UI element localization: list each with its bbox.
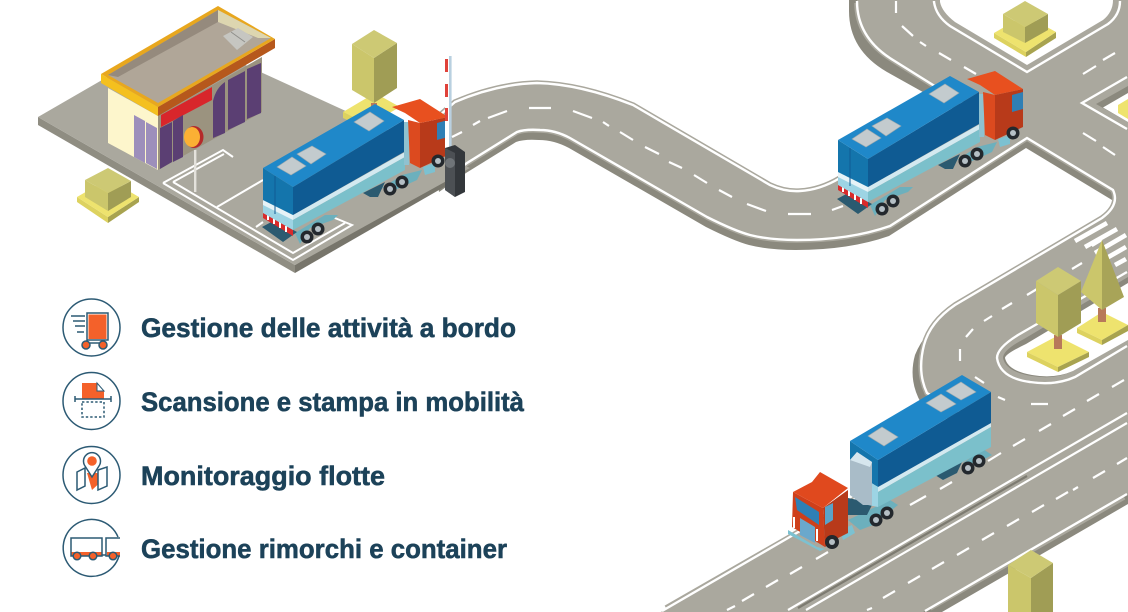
rear chassis: [935, 462, 962, 480]
left wall: [108, 88, 158, 170]
tree cone: [1077, 240, 1128, 345]
building: [101, 6, 275, 192]
wheels rear: [962, 462, 974, 474]
windows: [160, 63, 261, 169]
road island top: [934, 0, 1120, 72]
red sign: [161, 87, 212, 127]
hazard strip: [263, 212, 293, 236]
icon: map pin: [63, 446, 120, 504]
chassis: [295, 215, 338, 244]
fairing: [850, 452, 872, 505]
tree cube: [1027, 267, 1089, 372]
truck on highway: [788, 375, 992, 551]
trailer: [878, 423, 991, 492]
roof vents: [868, 382, 976, 446]
icon: truck: [63, 299, 120, 356]
round sign: [184, 126, 204, 192]
fifth wheel chassis: [848, 500, 898, 530]
parking lines: [163, 150, 352, 260]
right wall: [158, 57, 262, 170]
truck parked at lot: [262, 99, 448, 244]
roof vents: [277, 112, 384, 175]
median double line: [788, 413, 1127, 610]
tree near lot: [343, 30, 400, 130]
road island right: [1082, 77, 1128, 129]
shrub bottom right: [1008, 550, 1053, 612]
parking lot: [38, 35, 470, 273]
barrier: [445, 56, 465, 197]
icon: scan document: [63, 372, 120, 430]
feature list: [63, 299, 525, 576]
shrub far right: [1118, 99, 1128, 119]
roof: [101, 6, 275, 116]
crosswalk: [1075, 223, 1126, 265]
roof units: [223, 28, 253, 50]
cab: [823, 490, 848, 547]
truck on road: [837, 71, 1023, 216]
lane dashes: [433, 1, 1127, 610]
heading 2: Scansione e stampa in mobilità: [141, 387, 525, 417]
shrub top right: [994, 1, 1056, 57]
shrub left: [77, 168, 139, 223]
trailer: [263, 200, 293, 230]
wheels: [300, 176, 408, 244]
heading 1: Gestione delle attività a bordo: [141, 313, 516, 343]
icon: trailers: [63, 519, 120, 576]
doors: [134, 115, 145, 163]
heading 4: Gestione rimorchi e container: [141, 534, 507, 564]
road network: [431, 0, 1128, 612]
heading 3: Monitoraggio flotte: [141, 461, 385, 491]
road island with trees: [997, 272, 1128, 383]
cab: [392, 99, 448, 175]
